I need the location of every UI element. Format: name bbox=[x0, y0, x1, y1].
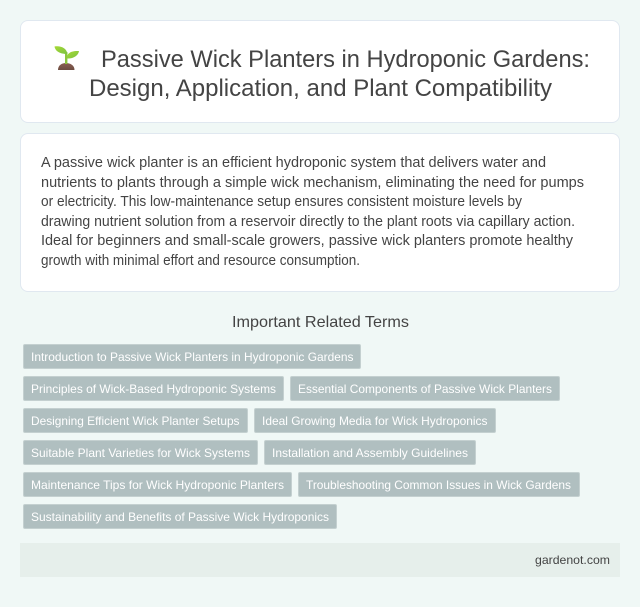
icon: seedling bbox=[54, 46, 79, 70]
chip: growing media bbox=[254, 408, 496, 433]
chip labels: Ideal Growing Media for Wick Hydroponics bbox=[262, 414, 488, 428]
chip: principles bbox=[23, 376, 284, 401]
footer bar bbox=[20, 543, 620, 577]
title bbox=[89, 46, 590, 102]
title: Passive Wick Planters in Hydroponic Gardens: bbox=[101, 46, 590, 73]
chip labels: Introduction to Passive Wick Planters in Hydroponic Gardens bbox=[31, 350, 354, 364]
description text: Ideal for beginners and small-scale growers, passive wick planters promote healthy bbox=[41, 233, 574, 249]
chip labels: Installation and Assembly Guidelines bbox=[272, 446, 468, 460]
chip labels: Designing Efficient Wick Planter Setups bbox=[31, 414, 240, 428]
description text: drawing nutrient solution from a reservoir directly to the plant roots via capillary action. bbox=[41, 214, 575, 230]
chip: sustainability bbox=[23, 504, 336, 529]
section heading: Important Related Terms bbox=[232, 314, 409, 331]
chip labels bbox=[31, 350, 571, 524]
panel: description card bbox=[20, 133, 620, 292]
chip: components bbox=[290, 376, 560, 401]
chip labels: Troubleshooting Common Issues in Wick Gardens bbox=[306, 478, 571, 492]
description text: A passive wick planter is an efficient hydroponic system that delivers water and bbox=[41, 155, 546, 171]
chip labels: Sustainability and Benefits of Passive Wick Hydroponics bbox=[31, 510, 329, 524]
description text: growth with minimal effort and resource consumption. bbox=[41, 253, 360, 269]
chip: installation bbox=[264, 440, 476, 465]
footer text: gardenot.com bbox=[535, 553, 610, 567]
chip: introduction bbox=[23, 344, 361, 369]
chip labels: Maintenance Tips for Wick Hydroponic Planters bbox=[31, 478, 284, 492]
chip: maintenance bbox=[23, 472, 292, 497]
chip: designing bbox=[23, 408, 248, 433]
description text: or electricity. This low-maintenance setup ensures consistent moisture levels by bbox=[41, 194, 523, 210]
chip: plant varieties bbox=[23, 440, 258, 465]
description text bbox=[41, 155, 584, 269]
chip labels: Suitable Plant Varieties for Wick Systems bbox=[31, 446, 250, 460]
description text: nutrients to plants through a simple wick mechanism, eliminating the need for pumps bbox=[41, 175, 584, 191]
chip labels: Essential Components of Passive Wick Planters bbox=[298, 382, 552, 396]
chip labels: Principles of Wick-Based Hydroponic Systems bbox=[31, 382, 276, 396]
panel: title card bbox=[20, 20, 620, 123]
title: Design, Application, and Plant Compatibility bbox=[89, 75, 552, 102]
chip: troubleshooting bbox=[298, 472, 580, 497]
